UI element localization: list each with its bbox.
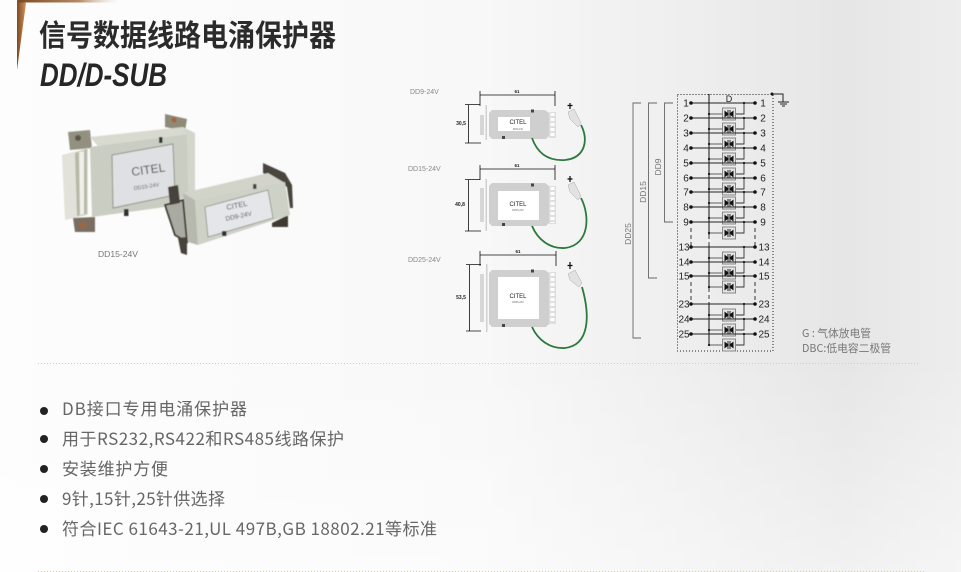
bracket: DD9: DD9	[653, 158, 663, 176]
wiring diagram	[623, 92, 789, 351]
row 14: 14	[758, 258, 770, 268]
photo caption: DD15-24V	[98, 249, 138, 259]
row 14	[678, 258, 770, 279]
row 25: 25	[678, 330, 690, 340]
row 3: 3	[683, 128, 689, 140]
row 6: 6	[760, 174, 766, 184]
ground wire	[532, 176, 586, 248]
model label: DD9-24V	[410, 89, 439, 96]
row 23: 23	[678, 300, 690, 310]
row 13: 13	[758, 242, 770, 254]
row 9: 9	[760, 218, 766, 228]
gap markers	[708, 235, 710, 302]
feature 3: 安装维护方便	[62, 455, 168, 480]
common bus line	[708, 94, 710, 345]
upper divider	[38, 362, 920, 364]
row 5	[683, 158, 766, 180]
row 24: 24	[758, 314, 770, 326]
protector body: CITEL	[509, 120, 527, 126]
row 2: 2	[683, 114, 689, 124]
width value: 61	[514, 89, 520, 94]
row 4: 4	[760, 144, 766, 154]
feature 1: DB接口专用电涌保护器	[62, 395, 247, 420]
legend entry: DBC: DBC:低电容二极管	[802, 340, 891, 356]
large unit: DD15-24V: DD15-24V	[133, 182, 160, 192]
ground wire	[532, 262, 587, 348]
row 14: 14	[678, 258, 690, 268]
bracket: DD15	[638, 103, 657, 278]
dimensions	[466, 251, 556, 331]
row 24: 24	[678, 314, 690, 326]
row 23: 23	[758, 300, 770, 310]
row 15: 15	[678, 272, 690, 282]
drawing: DD15-24V	[408, 163, 586, 248]
feature 5: 符合IEC 61643-21,UL 497B,GB 18802.21等标准	[62, 515, 437, 540]
row 5: 5	[760, 158, 766, 170]
row 9: 9	[683, 218, 689, 228]
width value: 61	[515, 249, 521, 254]
subtitle: model name: DD/D-SUB	[40, 57, 167, 93]
feature list	[40, 395, 437, 540]
legend	[802, 325, 891, 356]
row 25: 25	[758, 330, 770, 340]
row 2: 2	[760, 114, 766, 124]
row 4	[683, 144, 766, 165]
feature 2: 用于RS232,RS422和RS485线路保护	[62, 425, 344, 450]
ground symbol	[770, 92, 789, 106]
bracket: DD9	[653, 103, 673, 222]
row 6	[683, 174, 766, 195]
dimensions	[465, 91, 555, 143]
row 5: 5	[683, 158, 689, 170]
height value: 30,5	[456, 121, 466, 127]
drawing: DD25-24V	[408, 249, 587, 348]
dimensions	[465, 165, 555, 231]
row 6: 6	[683, 174, 689, 184]
row 3	[683, 128, 766, 150]
row 1	[683, 98, 766, 120]
protector body: DD15-24V	[512, 209, 524, 212]
protector body: CITEL	[509, 294, 527, 300]
protector body: DD9-24V	[513, 128, 523, 131]
large unit: DD15-24V	[62, 114, 195, 232]
row 15	[678, 272, 770, 293]
row 4: 4	[683, 144, 689, 154]
gap dashes	[691, 228, 755, 304]
title: 信号数据线路电涌保护器	[39, 11, 336, 55]
small unit: DD9-24V: CITEL	[226, 199, 248, 212]
model label: DD15-24V	[408, 166, 441, 173]
row 3: 3	[760, 128, 766, 140]
decorative corner accent	[17, 0, 120, 70]
row 25	[678, 330, 770, 351]
large unit: DD15-24V: CITEL	[130, 160, 166, 179]
width value: 61	[514, 163, 520, 168]
feature 4: 9针,15针,25针供选择	[62, 485, 225, 510]
bracket: DD25: DD25	[623, 223, 633, 245]
height value: 53,5	[456, 295, 466, 301]
protector body	[480, 179, 556, 231]
row 23	[678, 300, 770, 321]
dotted enclosure	[678, 94, 773, 351]
small unit: DD9-24V	[165, 163, 293, 255]
row 8: 8	[760, 202, 766, 214]
lower divider	[38, 570, 925, 572]
protector body	[480, 264, 556, 332]
bracket: DD25	[623, 103, 641, 338]
component label D: D	[726, 94, 733, 104]
row 1: 1	[760, 98, 766, 110]
row 9	[683, 218, 766, 239]
model label: DD25-24V	[408, 257, 441, 264]
bracket: DD15: DD15	[638, 181, 648, 203]
small unit: DD9-24V: DD9-24V	[225, 210, 253, 223]
row 7: 7	[683, 188, 689, 198]
protector body: DD25-24V	[512, 301, 524, 304]
product photo: two surge protectors	[62, 114, 293, 255]
row 2	[683, 114, 766, 135]
row 8: 8	[683, 202, 689, 214]
row 7	[683, 188, 766, 209]
protector body	[480, 105, 556, 140]
row 8	[683, 202, 766, 224]
legend entry: G: G : 气体放电管	[802, 325, 871, 341]
row 24	[678, 314, 770, 336]
row 1: 1	[683, 98, 689, 110]
ground wire	[532, 103, 585, 160]
drawing: DD9-24V	[410, 89, 585, 160]
height value: 40,8	[455, 202, 465, 208]
row 13	[678, 242, 770, 264]
row 15: 15	[758, 272, 770, 282]
row 7: 7	[760, 188, 766, 198]
row 13: 13	[678, 242, 690, 254]
protector body: CITEL	[509, 202, 527, 208]
